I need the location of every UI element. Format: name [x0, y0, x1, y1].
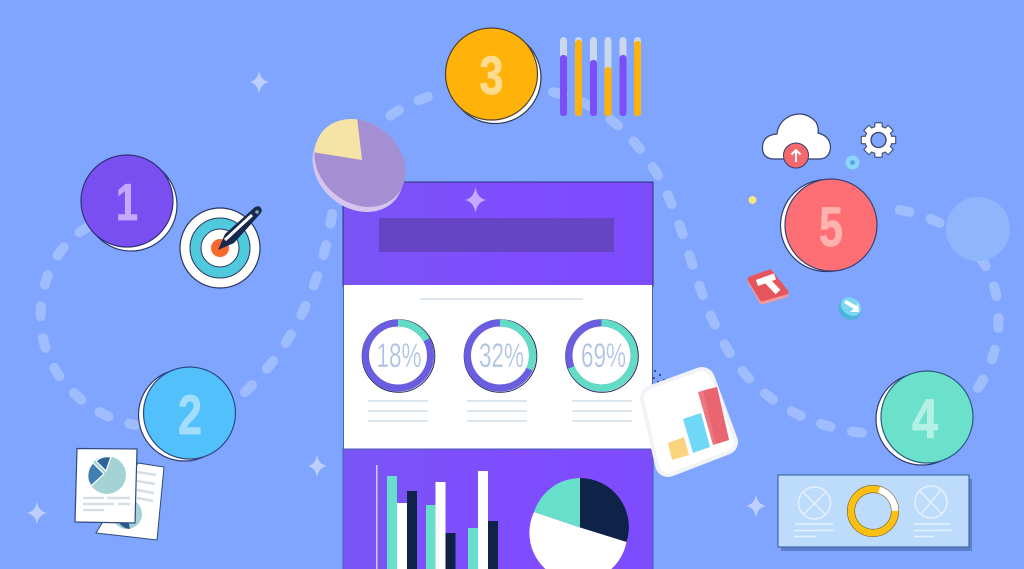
- progress ring 32%: [464, 320, 537, 392]
- donut chart: [845, 483, 901, 539]
- step 1: 1: [116, 174, 138, 232]
- icon: 3D bar chart tile: [653, 370, 729, 464]
- front document: [75, 448, 137, 523]
- progress ring 69%: [566, 320, 638, 392]
- icon: gear: [861, 122, 896, 158]
- caption placeholder lines: [368, 400, 632, 422]
- faint decorative circle: [946, 197, 1010, 261]
- step 5: [780, 179, 877, 272]
- step 2: [138, 367, 236, 461]
- icon: red T tile: [750, 272, 786, 302]
- step 1: [81, 155, 177, 251]
- icon: small yellow dot: [748, 196, 756, 204]
- step 3: 3: [480, 46, 504, 106]
- central report page: [343, 182, 653, 569]
- header title bar: [379, 218, 614, 252]
- panel: mini dashboard card: [778, 475, 972, 551]
- dashed route connecting the steps: [41, 92, 999, 434]
- step 2: 2: [178, 383, 202, 446]
- sparkles: [27, 70, 766, 525]
- progress ring 69%: 69%: [581, 337, 626, 375]
- bar chart: [376, 465, 498, 569]
- page header band: [343, 182, 653, 286]
- step 4: 4: [912, 387, 938, 450]
- page white section: [343, 285, 653, 449]
- page lower band with charts: [343, 449, 653, 569]
- step 3: [446, 28, 541, 124]
- progress ring 32%: 32%: [479, 337, 524, 375]
- icon: small blue dot: [846, 156, 860, 170]
- step 4: [876, 371, 973, 465]
- icon: target with dart: [180, 206, 262, 288]
- progress ring 18%: 18%: [376, 337, 422, 375]
- back document: [96, 463, 164, 540]
- icon: report documents: [75, 448, 164, 540]
- icon: vertical progress bars: [560, 37, 641, 116]
- floating 3D pie icon: [312, 119, 406, 212]
- pie chart: [529, 478, 629, 569]
- icon: cloud upload: [762, 114, 830, 168]
- sparkle on header: [465, 187, 486, 213]
- crossed circle placeholders: [794, 486, 952, 536]
- progress ring 18%: [362, 320, 435, 392]
- step 5: 5: [819, 195, 843, 258]
- icon: blue arrow token: [834, 293, 866, 324]
